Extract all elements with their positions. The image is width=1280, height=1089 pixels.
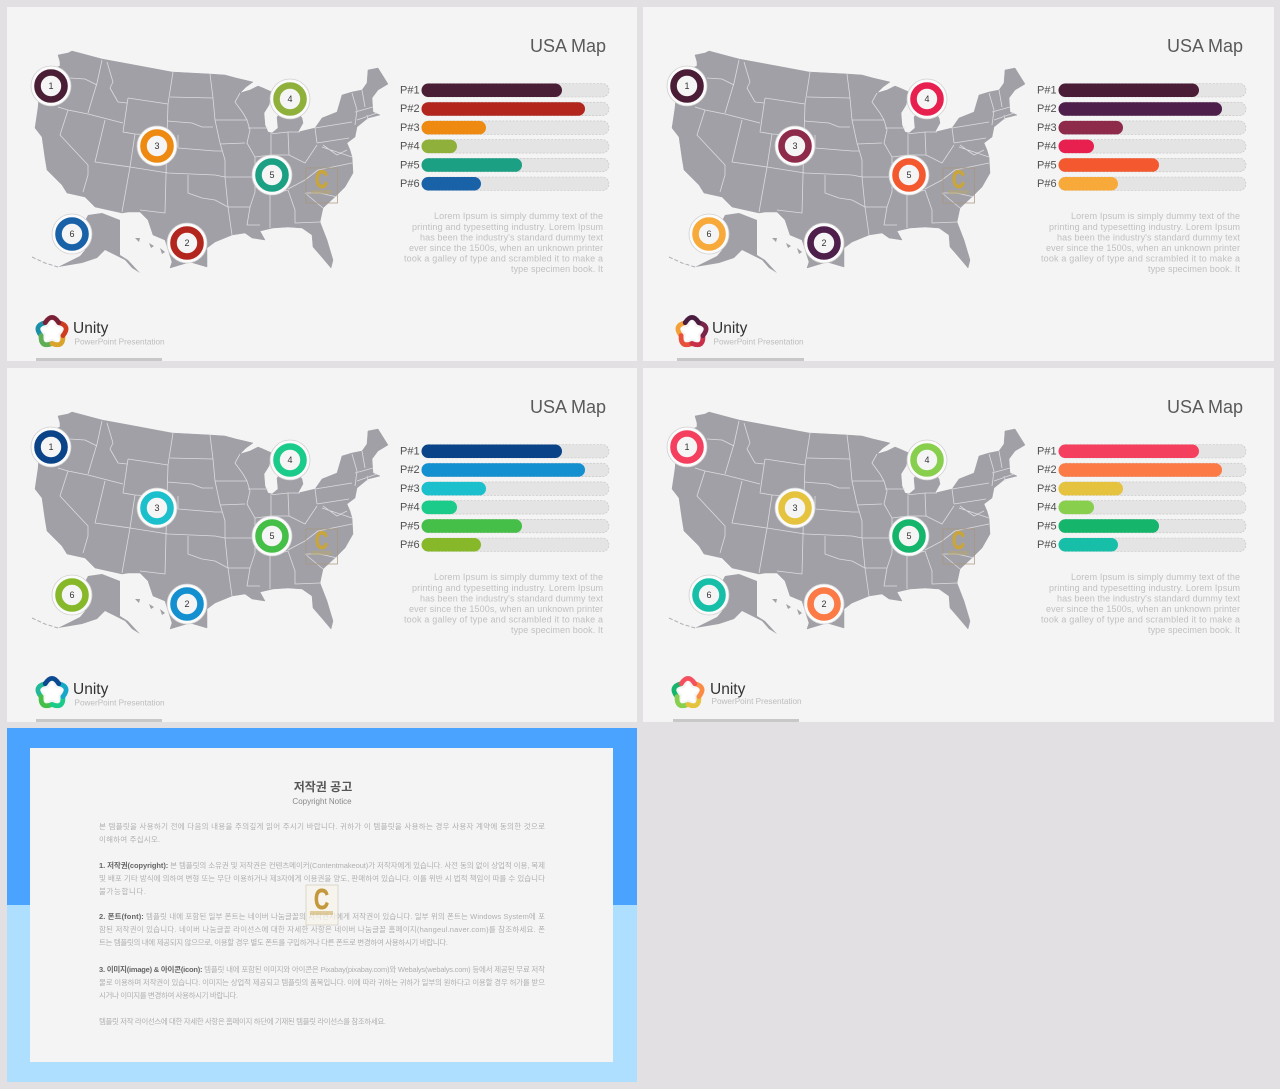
- marker 5: 5: [269, 170, 275, 180]
- watermark: C: [952, 165, 965, 194]
- description text: ever since the 1500s, when an unknown printer: [409, 604, 603, 614]
- marker 5: 5: [906, 531, 912, 541]
- bar chart: P#4: [1037, 140, 1057, 152]
- description text: has been the industry's standard dummy text: [420, 594, 603, 604]
- description text: [404, 211, 603, 274]
- description text: printing and typesetting industry. Lorem Ipsum: [1049, 583, 1240, 593]
- marker 1: [31, 427, 71, 467]
- notice body text: 템플릿 저작 라이선스에 대한 자세한 사항은 홈페이지 하단에 기재된 템플릿 라이선스를 참조하세요.: [99, 1016, 386, 1026]
- description text: Lorem Ipsum is simply dummy text of the: [1071, 572, 1240, 582]
- marker 6: [52, 575, 92, 615]
- marker 3: 3: [792, 503, 798, 513]
- bar chart: P#6: [400, 539, 420, 551]
- blue background top: [7, 728, 637, 905]
- marker 6: 6: [69, 590, 75, 600]
- logo: [38, 678, 165, 708]
- notice body text: 함된 저작권이 있습니다. 네이버 나눔글꼴 라이선스에 대한 자세한 사항은 네이버 나눔글꼴 홈페이지(hangeul.naver.com)를 참조하세요. 폰: [99, 924, 545, 934]
- title: USA Map: [1167, 36, 1243, 56]
- panel: copyright notice: [7, 728, 637, 1082]
- description text: printing and typesetting industry. Lorem Ipsum: [412, 222, 603, 232]
- marker 4: 4: [287, 94, 293, 104]
- marker 6: [689, 575, 729, 615]
- logo: Unity: [73, 681, 109, 698]
- bar chart: P#4: [1037, 502, 1057, 514]
- panel: USA map slide 3: [7, 368, 637, 722]
- footer bar: [36, 719, 162, 722]
- description text: has been the industry's standard dummy text: [420, 232, 603, 242]
- marker 6: [689, 214, 729, 254]
- marker 6: 6: [69, 229, 75, 239]
- marker 4: 4: [924, 455, 930, 465]
- marker 2: [167, 584, 207, 624]
- bar chart: P#5: [400, 520, 420, 532]
- logo: PowerPoint Presentation: [714, 338, 804, 346]
- bar chart: [400, 444, 609, 552]
- notice body text: 본 템플릿을 사용하기 전에 다음의 내용을 주의깊게 읽어 주시기 바랍니다. 귀하가 이 템플릿을 사용하는 경우 사용자 계약에 동의한 것으로: [99, 821, 545, 831]
- logo: PowerPoint Presentation: [74, 698, 165, 708]
- description text: has been the industry's standard dummy text: [1057, 594, 1240, 604]
- light blue background bottom: [7, 905, 637, 1082]
- marker 6: [52, 214, 92, 254]
- marker 2: [804, 223, 844, 263]
- notice body text: 이해하여 주십시오.: [99, 834, 160, 844]
- marker 3: [775, 126, 815, 166]
- notice card: [30, 748, 613, 1062]
- title: USA Map: [530, 36, 606, 56]
- bar chart: P#3: [400, 483, 420, 495]
- bar chart: [400, 84, 609, 190]
- notice body text: 시거나 이미지를 변경하여 사용하시기 바랍니다.: [99, 990, 238, 1000]
- notice body text: 불가능합니다.: [99, 887, 146, 896]
- notice body text: 2. 폰트(font): 템플릿 내에 포함된 일부 폰트는 네이버 나눔글꼴의 저작권자에게 저작권이 있습니다. 일부 위의 폰트는 Windows System에 포: [99, 911, 545, 921]
- description text: took a galley of type and scrambled it to make a: [1041, 254, 1240, 264]
- notice body text: 물로 이용하며 저작권이 있습니다. 이미지는 상업적 제공되고 템플릿의 품목입니다. 이에 따라 귀하는 귀하가 일부의 원하다고 이용할 경우 허가를 받으: [99, 977, 545, 987]
- footer bar: [673, 719, 799, 722]
- map of USA: [32, 51, 388, 273]
- bar chart: P#1: [400, 446, 420, 458]
- logo: [678, 317, 804, 346]
- panel: USA map slide 4: [643, 368, 1274, 722]
- bar chart: P#2: [400, 103, 420, 115]
- marker 2: 2: [821, 599, 827, 609]
- bar chart: P#2: [1037, 464, 1057, 476]
- watermark: [306, 884, 338, 925]
- description text: printing and typesetting industry. Lorem Ipsum: [412, 583, 603, 593]
- marker 3: [775, 488, 815, 528]
- description text: type specimen book. It: [1148, 625, 1240, 635]
- marker 1: 1: [684, 81, 690, 91]
- description text: type specimen book. It: [1148, 264, 1240, 274]
- marker 4: [270, 440, 310, 480]
- description text: type specimen book. It: [511, 264, 603, 274]
- title: USA Map: [530, 397, 606, 417]
- notice body text: 1. 저작권(copyright): 본 템플릿의 소유권 및 저작권은 컨텐츠메이커(Contentmakeout)가 저작자에게 있습니다. 사전 동의 없이 상업적 이용, 복제: [99, 860, 545, 870]
- footer bar: [36, 358, 162, 361]
- watermark: [306, 526, 338, 564]
- notice body text: [99, 821, 545, 1026]
- bar chart: P#3: [1037, 483, 1057, 495]
- description text: Lorem Ipsum is simply dummy text of the: [434, 572, 603, 582]
- watermark: C: [315, 526, 328, 555]
- watermark: [306, 165, 338, 203]
- bar chart: [1037, 444, 1246, 552]
- bar chart: P#5: [1037, 159, 1057, 171]
- watermark: [943, 165, 974, 203]
- watermark: C: [315, 165, 328, 194]
- description text: took a galley of type and scrambled it to make a: [404, 614, 603, 624]
- notice heading: 저작권 공고: [294, 779, 352, 794]
- notice body text: 3. 이미지(image) & 아이콘(icon): 템플릿 내에 포함된 이미지와 아이콘은 Pixabay(pixabay.com)와 Webalys(webalys.com) 등에서 제공된 무료 저작: [99, 964, 545, 974]
- bar chart: P#5: [1037, 520, 1057, 532]
- logo: PowerPoint Presentation: [712, 697, 802, 706]
- map of USA: [669, 412, 1025, 634]
- bar chart: P#1: [1037, 446, 1057, 458]
- panel: USA map slide 1: [7, 7, 637, 361]
- marker 5: 5: [269, 531, 275, 541]
- marker 3: [137, 126, 177, 166]
- description text: [404, 572, 603, 635]
- logo: [674, 678, 802, 706]
- marker 4: [907, 79, 947, 119]
- bar chart: P#2: [400, 464, 420, 476]
- bar chart: P#4: [400, 502, 420, 514]
- description text: took a galley of type and scrambled it to make a: [1041, 614, 1240, 624]
- notice subheading: Copyright Notice: [292, 797, 352, 806]
- watermark: C: [314, 884, 329, 916]
- description text: [1041, 572, 1240, 635]
- bar chart: P#5: [400, 159, 420, 171]
- description text: type specimen book. It: [511, 625, 603, 635]
- bar chart: P#1: [400, 84, 420, 96]
- marker 1: [667, 427, 707, 467]
- bar chart: P#4: [400, 140, 420, 152]
- description text: ever since the 1500s, when an unknown printer: [409, 243, 603, 253]
- description text: took a galley of type and scrambled it to make a: [404, 254, 603, 264]
- notice body text: 및 배포 기타 방식에 의하여 변형 또는 무단 이용하거나 제3자에게 이용권을 양도, 판매하여 있습니다. 이를 위반 시 법적 책임이 따를 수 있습니다: [99, 873, 545, 883]
- marker 4: [270, 79, 310, 119]
- description text: Lorem Ipsum is simply dummy text of the: [1071, 211, 1240, 221]
- marker 1: 1: [48, 81, 54, 91]
- marker 6: 6: [706, 590, 712, 600]
- marker 2: [167, 223, 207, 263]
- description text: [1041, 211, 1240, 274]
- bar chart: P#1: [1037, 84, 1057, 96]
- description text: ever since the 1500s, when an unknown printer: [1046, 243, 1240, 253]
- panel: USA map slide 2: [643, 7, 1274, 361]
- marker 1: [667, 66, 707, 106]
- watermark: [943, 526, 974, 564]
- marker 1: 1: [48, 442, 54, 452]
- logo: Unity: [712, 320, 748, 337]
- bar chart: P#6: [400, 178, 420, 190]
- logo: PowerPoint Presentation: [74, 338, 165, 346]
- logo: Unity: [73, 320, 109, 337]
- logo: [38, 317, 165, 346]
- bar chart: [1037, 84, 1246, 190]
- marker 2: [804, 584, 844, 624]
- map of USA: [32, 412, 388, 634]
- marker 2: 2: [184, 599, 190, 609]
- marker 5: 5: [906, 170, 912, 180]
- marker 5: [252, 155, 292, 195]
- bar chart: P#6: [1037, 539, 1057, 551]
- description text: ever since the 1500s, when an unknown printer: [1046, 604, 1240, 614]
- logo: Unity: [710, 681, 746, 698]
- marker 5: [252, 516, 292, 556]
- title: USA Map: [1167, 397, 1243, 417]
- marker 4: 4: [287, 455, 293, 465]
- marker 2: 2: [184, 238, 190, 248]
- description text: printing and typesetting industry. Lorem Ipsum: [1049, 222, 1240, 232]
- notice body text: 트는 템플릿의 내에 제공되지 않으므로, 이용할 경우 별도 폰트를 구입하거나 다른 폰트로 변경하여 사용하시기 바랍니다.: [99, 937, 448, 947]
- marker 3: 3: [154, 503, 160, 513]
- description text: Lorem Ipsum is simply dummy text of the: [434, 211, 603, 221]
- marker 3: [137, 488, 177, 528]
- footer bar: [677, 358, 804, 361]
- marker 6: 6: [706, 229, 712, 239]
- marker 1: 1: [684, 442, 690, 452]
- description text: has been the industry's standard dummy text: [1057, 232, 1240, 242]
- marker 4: 4: [924, 94, 930, 104]
- watermark: C: [952, 526, 965, 555]
- bar chart: P#2: [1037, 103, 1057, 115]
- marker 3: 3: [792, 141, 798, 151]
- bar chart: P#6: [1037, 178, 1057, 190]
- map of USA: [669, 51, 1025, 273]
- marker 5: [889, 516, 929, 556]
- marker 3: 3: [154, 141, 160, 151]
- marker 2: 2: [821, 238, 827, 248]
- marker 5: [889, 155, 929, 195]
- marker 4: [907, 440, 947, 480]
- bar chart: P#3: [1037, 122, 1057, 134]
- marker 1: [31, 66, 71, 106]
- bar chart: P#3: [400, 122, 420, 134]
